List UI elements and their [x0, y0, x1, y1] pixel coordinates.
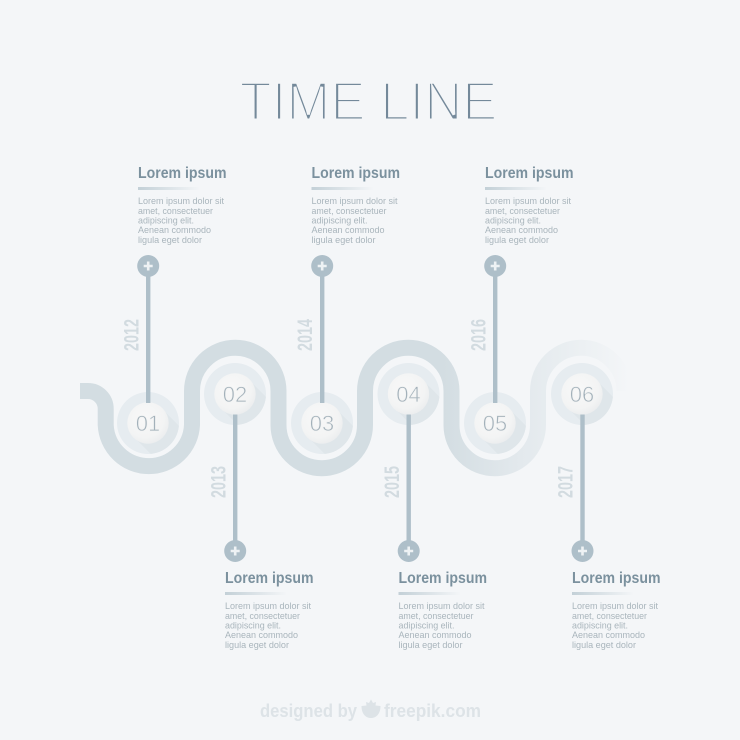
text block: 2012 — [138, 165, 226, 245]
body text: amet, consectetuer — [312, 205, 386, 216]
body text: Lorem ipsum dolor sit — [485, 195, 571, 206]
body text — [312, 195, 398, 245]
year 2013: 2013 — [206, 466, 230, 498]
icon: freepik crown — [362, 700, 380, 718]
body text: ligula eget dolor — [225, 639, 289, 650]
footer credit — [260, 700, 481, 721]
heading: Lorem ipsum — [138, 165, 226, 182]
connector: 2017 — [572, 414, 594, 562]
body text: ligula eget dolor — [398, 639, 462, 650]
underline — [398, 592, 460, 595]
title: TIME LINE — [240, 70, 498, 132]
underline — [572, 592, 634, 595]
heading: Lorem ipsum — [485, 165, 574, 182]
connector: 2012 — [137, 255, 159, 403]
text block: 2016 — [485, 165, 574, 245]
body text: amet, consectetuer — [225, 610, 300, 621]
underline — [312, 187, 374, 190]
underline — [485, 187, 547, 190]
wavy timeline path — [80, 348, 624, 468]
body text — [398, 600, 485, 650]
body text: ligula eget dolor — [572, 639, 636, 650]
body text: Aenean commodo — [398, 629, 472, 640]
milestone 06 — [551, 363, 613, 562]
milestone 02 — [204, 363, 266, 562]
connector: 2014 — [311, 255, 333, 403]
year 2014: 2014 — [293, 319, 317, 351]
body text: amet, consectetuer — [138, 205, 213, 216]
marker 06 — [551, 363, 613, 425]
body text: Aenean commodo — [138, 224, 211, 235]
heading: Lorem ipsum — [312, 165, 400, 182]
body text: Lorem ipsum dolor sit — [138, 195, 224, 206]
body text: Aenean commodo — [225, 629, 298, 640]
body text: Aenean commodo — [485, 224, 558, 235]
credit text left: designed by — [260, 701, 357, 721]
marker 02 — [204, 363, 266, 425]
marker 05 — [464, 392, 526, 454]
body text: adipiscing elit. — [572, 620, 628, 630]
marker 01: 01 — [136, 411, 160, 436]
body text: amet, consectetuer — [572, 610, 647, 621]
body text: amet, consectetuer — [485, 205, 560, 216]
connector: 2015 — [398, 414, 420, 562]
year 2017: 2017 — [553, 466, 577, 498]
text block: 2014 — [312, 165, 400, 245]
marker 01 — [117, 392, 179, 454]
body text — [138, 195, 224, 245]
marker 05: 05 — [483, 411, 507, 436]
connector: 2016 — [484, 255, 506, 403]
marker 02: 02 — [223, 382, 247, 407]
marker 03: 03 — [310, 411, 334, 436]
body text: Lorem ipsum dolor sit — [572, 600, 658, 611]
heading: Lorem ipsum — [572, 570, 660, 587]
marker 04: 04 — [396, 382, 421, 407]
heading: Lorem ipsum — [225, 570, 314, 587]
body text: adipiscing elit. — [225, 620, 281, 630]
underline — [138, 187, 200, 190]
underline — [225, 592, 287, 595]
body text: amet, consectetuer — [398, 610, 474, 621]
body text: adipiscing elit. — [485, 214, 541, 226]
body text — [225, 600, 311, 650]
text block: 2017 — [572, 570, 660, 650]
heading: Lorem ipsum — [398, 570, 487, 587]
marker 06: 06 — [570, 382, 594, 407]
body text: Aenean commodo — [572, 629, 645, 640]
marker 04 — [378, 363, 440, 425]
year 2012: 2012 — [119, 319, 143, 351]
body text: Aenean commodo — [312, 224, 384, 235]
milestone 01 — [117, 255, 179, 454]
body text: Lorem ipsum dolor sit — [398, 600, 485, 611]
text block: 2015 — [398, 570, 487, 650]
text block: 2013 — [225, 570, 314, 650]
body text — [572, 600, 658, 650]
milestone 04 — [378, 363, 440, 562]
body text: Lorem ipsum dolor sit — [225, 600, 311, 611]
milestone 05 — [464, 255, 526, 454]
body text: ligula eget dolor — [312, 234, 376, 245]
year 2015: 2015 — [380, 466, 404, 498]
body text: adipiscing elit. — [398, 620, 454, 630]
year 2016: 2016 — [466, 319, 490, 351]
body text: adipiscing elit. — [312, 214, 368, 226]
body text — [485, 195, 571, 245]
body text: Lorem ipsum dolor sit — [312, 195, 398, 206]
body text: ligula eget dolor — [485, 234, 549, 245]
body text: adipiscing elit. — [138, 214, 194, 226]
marker 03 — [291, 392, 353, 454]
milestone 03 — [291, 255, 353, 454]
body text: ligula eget dolor — [138, 234, 202, 245]
connector: 2013 — [224, 414, 246, 562]
credit text right: freepik.com — [384, 701, 481, 721]
